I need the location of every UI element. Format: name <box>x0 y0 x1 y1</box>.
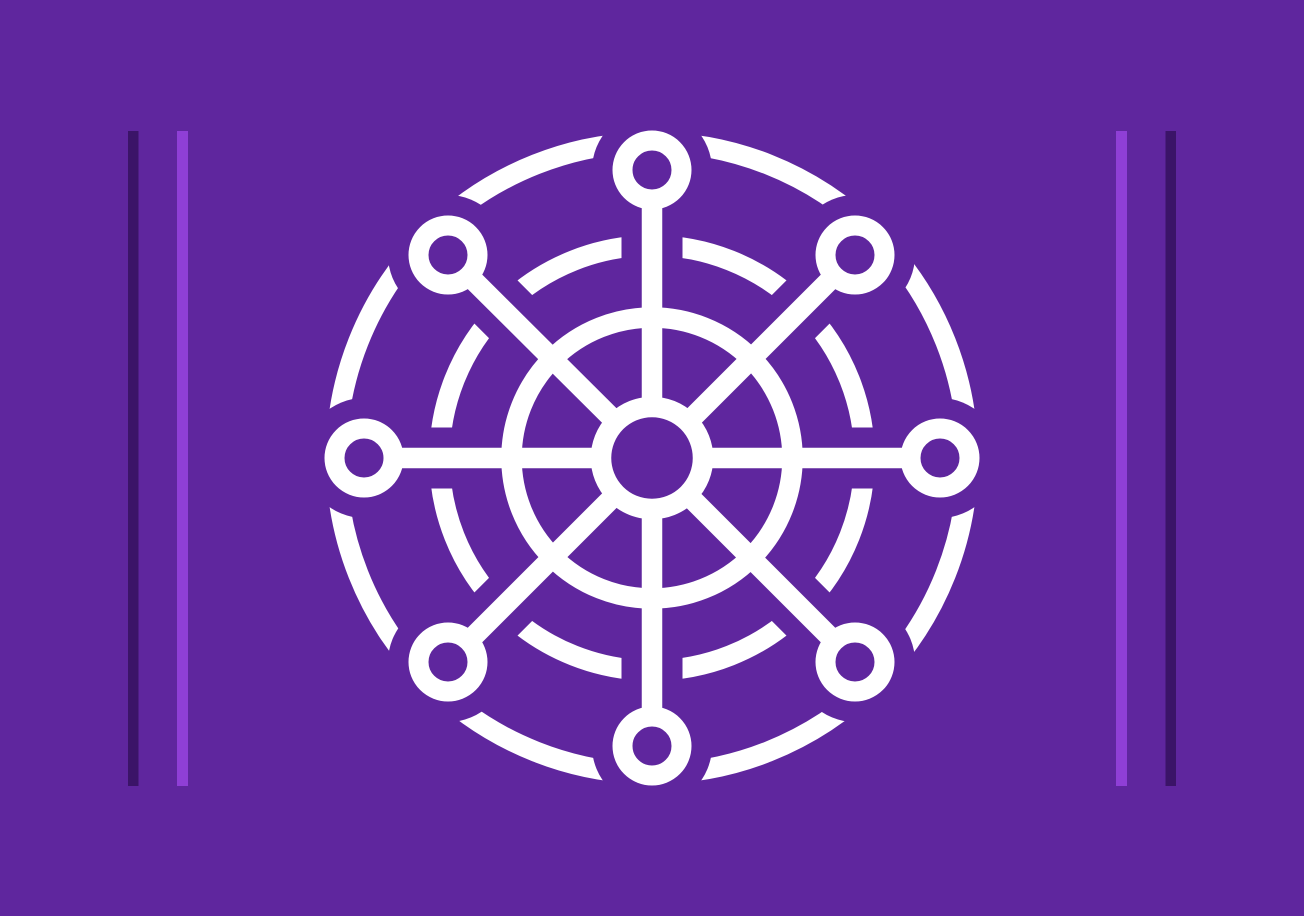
node: bottom right <box>826 632 884 692</box>
illustration: network wheel on purple background <box>128 130 1176 786</box>
central hub <box>601 407 703 509</box>
node: left <box>334 428 394 488</box>
inner ring <box>512 318 792 598</box>
node: top right <box>826 226 884 284</box>
node: bottom left <box>418 632 478 692</box>
node: top <box>622 140 682 200</box>
node: right <box>910 428 970 488</box>
node: top left <box>418 226 478 284</box>
nodes <box>334 140 970 776</box>
outer segmented ring <box>336 142 968 774</box>
node: bottom <box>622 716 682 776</box>
left vertical bars <box>128 131 188 786</box>
middle segmented ring <box>440 246 864 670</box>
spokes <box>364 170 940 746</box>
right vertical bars <box>1116 131 1176 786</box>
